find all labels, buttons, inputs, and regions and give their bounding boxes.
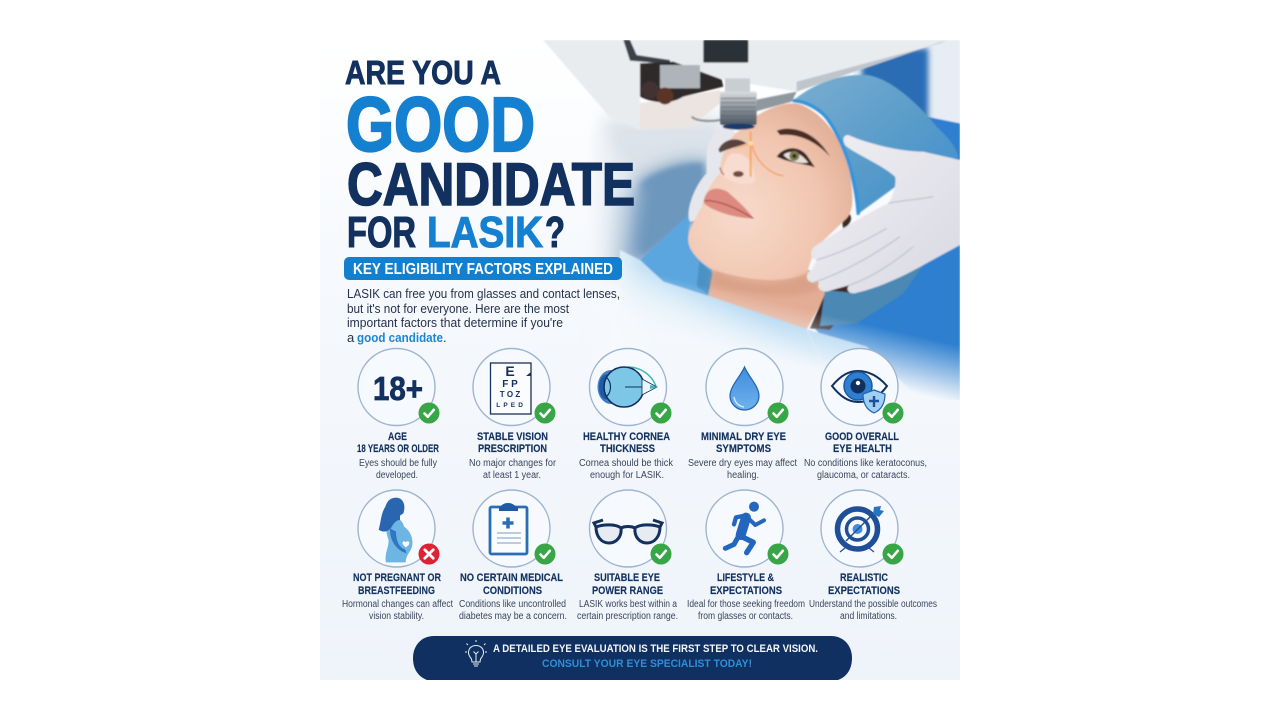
label: age bbox=[357, 431, 439, 481]
intro paragraph bbox=[347, 286, 620, 345]
badge: check bbox=[882, 544, 904, 564]
label: lifestyle: from glasses or contacts. bbox=[698, 611, 793, 622]
intro paragraph: . bbox=[443, 330, 447, 345]
factor: healthy cornea thickness bbox=[579, 348, 674, 481]
label: cornea: THICKNESS bbox=[600, 443, 655, 455]
badge: check bbox=[534, 402, 556, 424]
label: eye health: glaucoma, or cataracts. bbox=[817, 470, 910, 481]
icon: water drop bbox=[730, 367, 759, 410]
factor: lifestyle and expectations bbox=[687, 490, 805, 622]
label: dry eye: MINIMAL DRY EYE bbox=[701, 431, 786, 443]
label: power range: SUITABLE EYE bbox=[594, 572, 660, 584]
call to action banner bbox=[413, 636, 852, 680]
subtitle pill: KEY ELIGIBILITY FACTORS EXPLAINED bbox=[353, 261, 613, 278]
label: medical: NO CERTAIN MEDICAL bbox=[460, 572, 563, 584]
icon: target with arrow bbox=[838, 506, 884, 552]
label: medical bbox=[459, 572, 567, 622]
factor: suitable eye power range bbox=[577, 490, 678, 622]
label: medical: Conditions like uncontrolled bbox=[459, 599, 566, 610]
title: ARE YOU A bbox=[345, 55, 501, 92]
label: pregnancy bbox=[342, 572, 453, 622]
factor: realistic expectations bbox=[809, 490, 937, 622]
intro paragraph: LASIK can free you from glasses and contact lenses, bbox=[347, 286, 620, 301]
intro paragraph: but it's not for everyone. Here are the most bbox=[347, 301, 569, 316]
intro paragraph: a bbox=[347, 330, 355, 345]
badge: check bbox=[534, 544, 556, 564]
label: eye health: EYE HEALTH bbox=[833, 443, 892, 455]
factor: age bbox=[357, 348, 440, 481]
label: age: AGE bbox=[388, 431, 407, 443]
factor: no certain medical conditions bbox=[459, 490, 567, 622]
label: pregnancy: vision stability. bbox=[369, 611, 424, 622]
icon: eye with shield bbox=[832, 371, 887, 413]
label: cornea bbox=[579, 431, 674, 481]
icon: 18+: 18+ bbox=[373, 370, 423, 407]
label: realistic: and limitations. bbox=[840, 611, 897, 622]
icon: glasses bbox=[594, 520, 662, 543]
label: age: developed. bbox=[376, 470, 418, 481]
label: dry eye: SYMPTOMS bbox=[716, 443, 771, 455]
badge: check bbox=[768, 544, 788, 564]
label: cornea: Cornea should be thick bbox=[579, 458, 674, 469]
icon: light bulb bbox=[465, 640, 487, 666]
label: realistic bbox=[809, 572, 937, 622]
title: LASIK bbox=[427, 209, 544, 257]
icon: pregnant woman bbox=[379, 498, 413, 562]
label: realistic: REALISTIC bbox=[840, 572, 888, 584]
badge: check bbox=[650, 544, 672, 564]
label: stable vision: No major changes for bbox=[469, 458, 557, 469]
factor: stable vision prescription bbox=[469, 348, 557, 481]
badge: check bbox=[882, 402, 904, 424]
card background bbox=[320, 40, 960, 680]
title: GOOD bbox=[346, 82, 535, 168]
icon: runner bbox=[725, 502, 764, 553]
label: lifestyle: EXPECTATIONS bbox=[710, 585, 782, 597]
factor: good overall eye health bbox=[804, 348, 927, 481]
label: cornea: enough for LASIK. bbox=[590, 470, 664, 481]
label: stable vision: at least 1 year. bbox=[483, 470, 541, 481]
call to action banner: A DETAILED EYE EVALUATION IS THE FIRST STEP TO CLEAR VISION. bbox=[493, 643, 818, 655]
icon: eye chart bbox=[490, 363, 531, 414]
factor: not pregnant or breastfeeding bbox=[342, 490, 453, 622]
label: eye health: No conditions like keratoconus, bbox=[804, 458, 927, 469]
badge: check bbox=[768, 402, 788, 424]
label: power range: certain prescription range. bbox=[577, 611, 678, 622]
icon: clipboard bbox=[490, 503, 527, 554]
label: realistic: EXPECTATIONS bbox=[828, 585, 900, 597]
intro paragraph: good candidate bbox=[357, 330, 443, 345]
label: medical: CONDITIONS bbox=[483, 585, 542, 597]
label: pregnancy: NOT PREGNANT OR bbox=[353, 572, 441, 584]
badge: cross bbox=[418, 544, 440, 564]
label: age: Eyes should be fully bbox=[359, 458, 437, 469]
label: lifestyle bbox=[687, 572, 805, 622]
label: eye health bbox=[804, 431, 927, 481]
icon: eye cross-section bbox=[598, 367, 658, 407]
label: pregnancy: BREASTFEEDING bbox=[358, 585, 435, 597]
intro paragraph: important factors that determine if you're bbox=[347, 315, 563, 330]
title: ? bbox=[545, 209, 565, 257]
title bbox=[345, 55, 635, 257]
badge: check bbox=[418, 402, 440, 424]
title: FOR bbox=[347, 209, 416, 257]
label: lifestyle: Ideal for those seeking freedom bbox=[687, 599, 805, 610]
subtitle pill bbox=[344, 257, 622, 280]
icon: eye chart: F P bbox=[502, 379, 518, 390]
label: dry eye: healing. bbox=[727, 470, 759, 481]
icon: eye chart: E bbox=[505, 363, 515, 379]
label: stable vision: PRESCRIPTION bbox=[478, 443, 547, 455]
label: lifestyle: LIFESTYLE & bbox=[717, 572, 774, 584]
title: CANDIDATE bbox=[347, 151, 635, 218]
icon: eye chart: L P E D bbox=[496, 402, 524, 409]
badge: check bbox=[650, 402, 672, 424]
factor: minimal dry eye symptoms bbox=[688, 348, 797, 481]
label: medical: diabetes may be a concern. bbox=[459, 611, 567, 622]
call to action banner: CONSULT YOUR EYE SPECIALIST TODAY! bbox=[542, 658, 752, 670]
label: pregnancy: Hormonal changes can affect bbox=[342, 599, 453, 610]
label: cornea: HEALTHY CORNEA bbox=[583, 431, 670, 443]
label: dry eye bbox=[688, 431, 797, 481]
label: power range: LASIK works best within a bbox=[579, 599, 677, 610]
label: stable vision: STABLE VISION bbox=[477, 431, 548, 443]
label: stable vision bbox=[469, 431, 557, 481]
label: age: 18 YEARS OR OLDER bbox=[357, 443, 439, 455]
label: eye health: GOOD OVERALL bbox=[825, 431, 899, 443]
photo: patient under laser eye surgery machine bbox=[543, 40, 960, 407]
label: power range: POWER RANGE bbox=[592, 585, 663, 597]
icon: eye chart: T O Z bbox=[500, 390, 520, 399]
label: realistic: Understand the possible outcomes bbox=[809, 599, 937, 610]
label: dry eye: Severe dry eyes may affect bbox=[688, 458, 797, 469]
label: power range bbox=[577, 572, 678, 622]
